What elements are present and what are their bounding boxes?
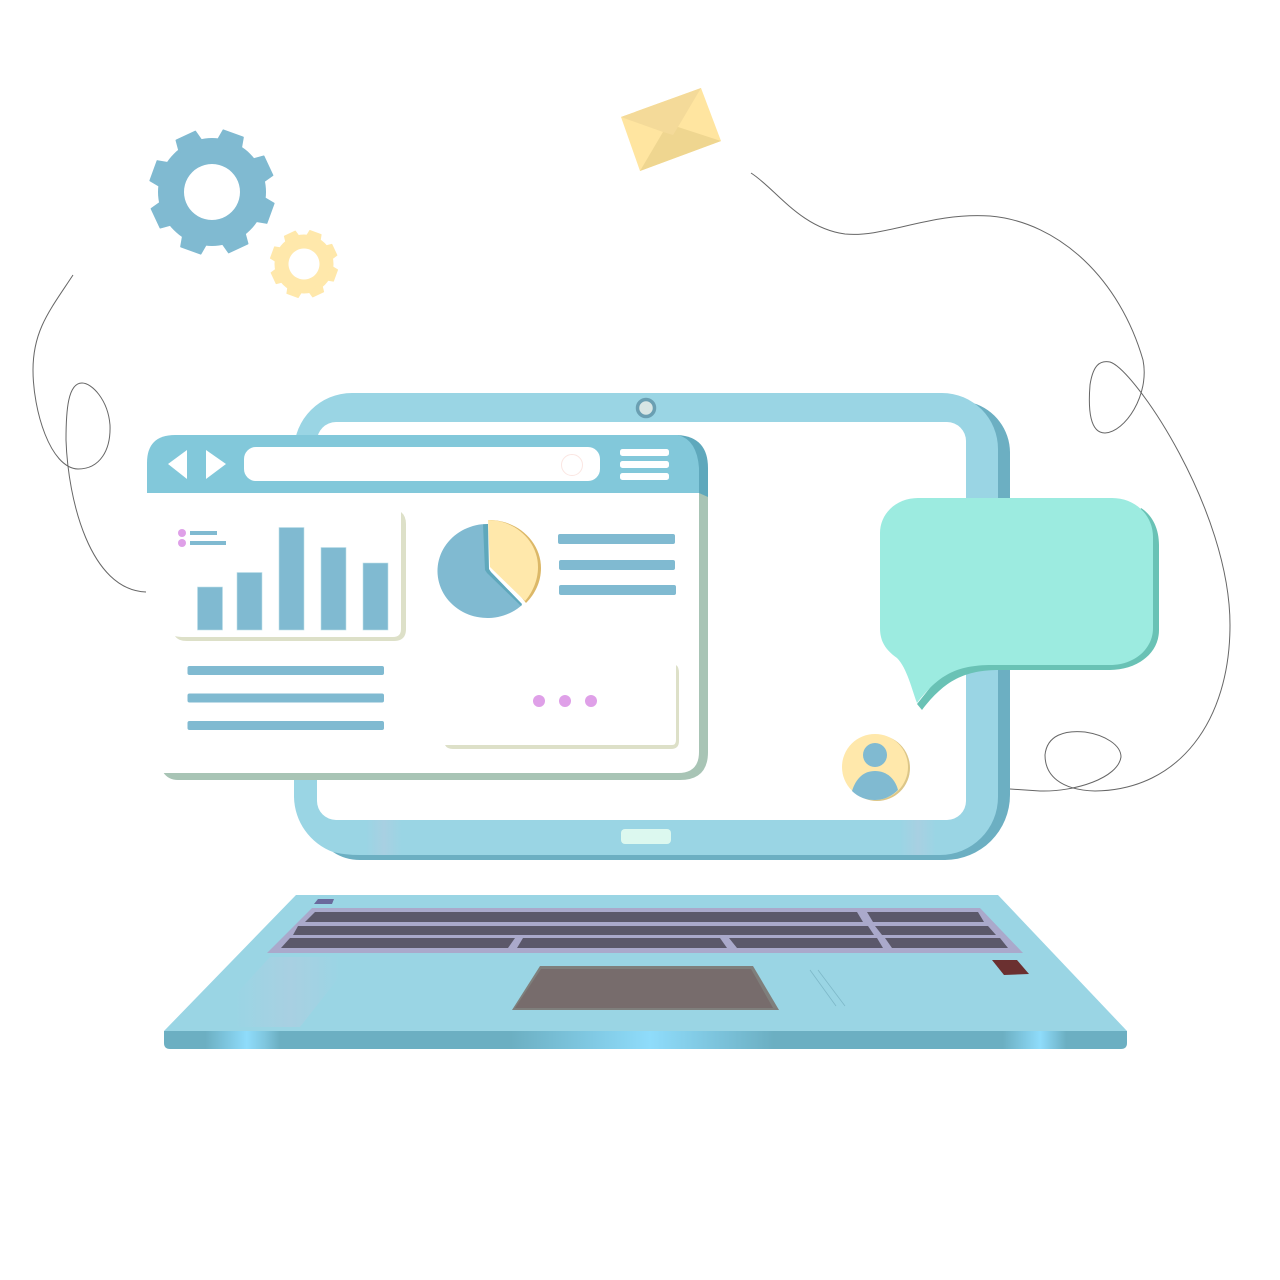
pie legend lines [558, 534, 676, 595]
forward arrow [206, 450, 226, 479]
laptop deck [164, 895, 1127, 1031]
tablet [294, 393, 1010, 860]
window body [147, 493, 699, 773]
bubble body [880, 498, 1153, 703]
tablet frame [294, 393, 998, 855]
camera [638, 400, 654, 416]
deck scratches [810, 970, 845, 1006]
bubble shadow [917, 508, 1159, 710]
tablet frame highlights [366, 820, 936, 855]
text lines [188, 666, 384, 730]
keys [281, 912, 1008, 948]
laptop base [164, 895, 1127, 1049]
keyboard [267, 908, 1023, 953]
browser window [147, 435, 708, 780]
curved line: left [33, 275, 146, 592]
search circle [562, 454, 582, 476]
laptop front edge [164, 1031, 1127, 1049]
trackpad [512, 966, 779, 1010]
header dark edge [670, 435, 708, 497]
chart legend [178, 529, 226, 547]
dots card [445, 665, 679, 749]
menu icon [620, 449, 669, 480]
red badge [992, 960, 1029, 975]
tablet screen [317, 422, 966, 820]
window header [147, 435, 699, 493]
speech bubble [880, 498, 1159, 710]
icon: user avatar [842, 734, 910, 801]
icon: large gear [133, 113, 291, 271]
back arrow [168, 450, 187, 479]
curved line: right [751, 173, 1230, 791]
status light [314, 899, 334, 904]
home button [621, 829, 671, 844]
bars [198, 528, 388, 630]
deck gloss [235, 957, 355, 1027]
bar chart card [175, 512, 406, 641]
icon: small gear [261, 221, 347, 307]
address bar [244, 447, 600, 481]
pie chart [437, 520, 541, 618]
icon: envelope [621, 88, 721, 171]
window shadow edge [163, 490, 708, 780]
tablet shadow edge [333, 403, 1010, 860]
